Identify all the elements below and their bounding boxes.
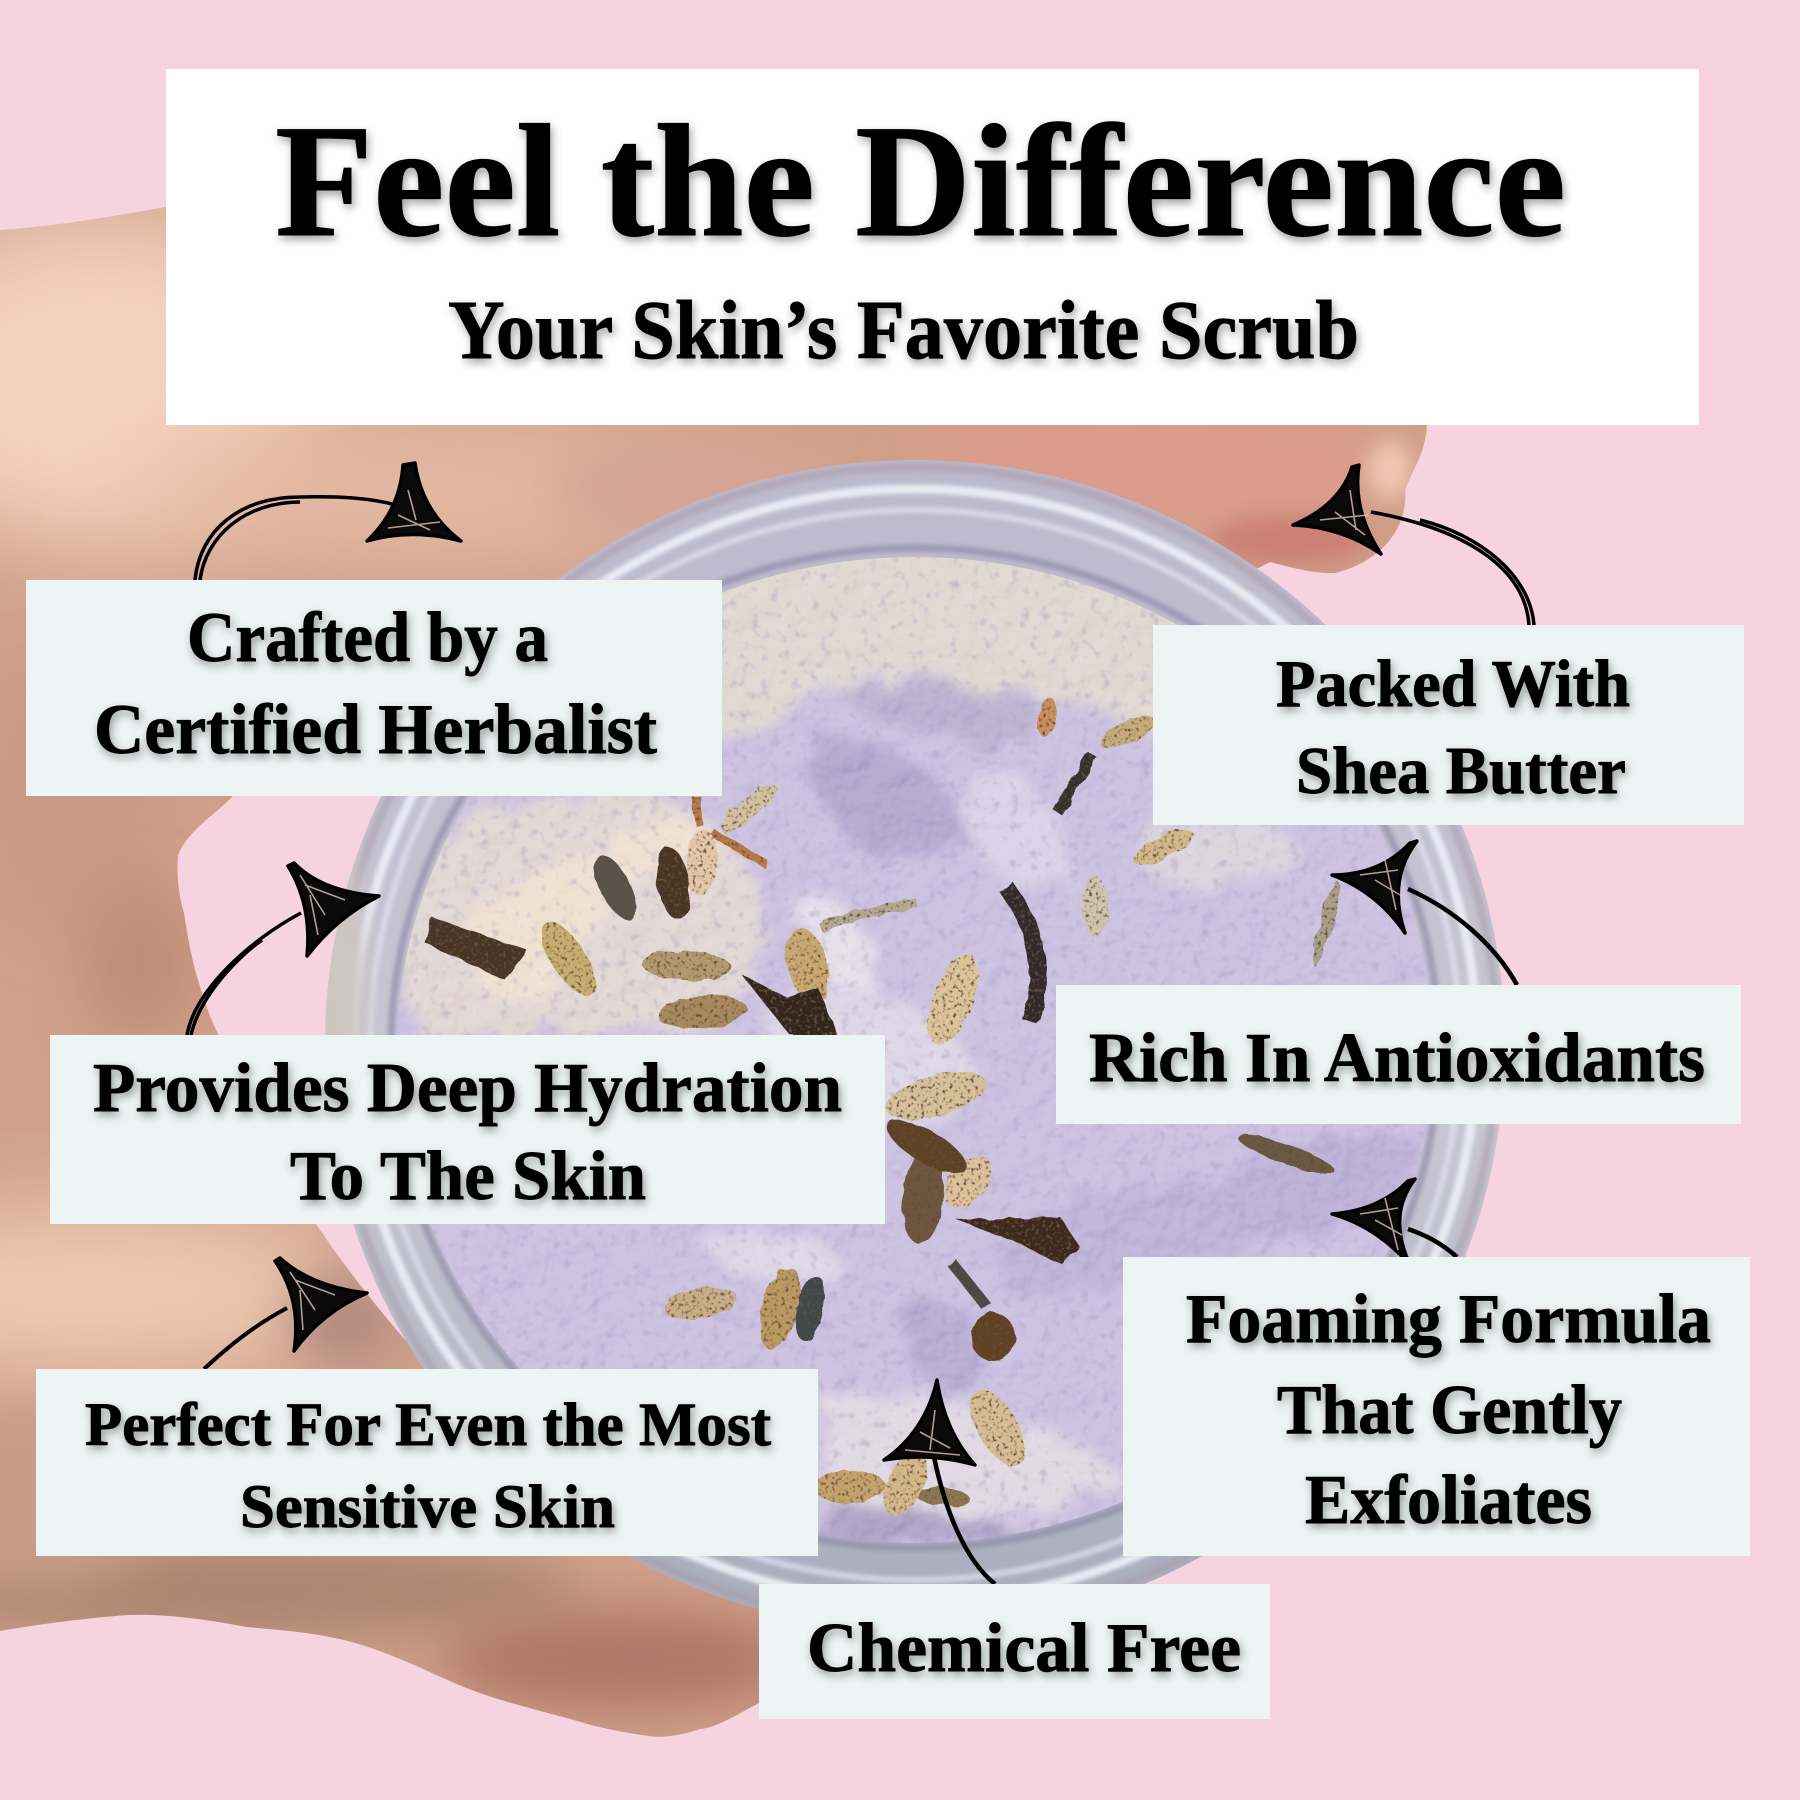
jar contents: scrub [380, 530, 1460, 1560]
scrub speckle [380, 540, 1460, 1560]
callout: foaming formula: Foaming Formula [1186, 1281, 1711, 1358]
callout: packed with shea butter [1153, 625, 1744, 825]
arrow: rich in antioxidants [1332, 841, 1517, 985]
photo: hand holding jar [0, 150, 1505, 1770]
jar glass rim [315, 460, 1505, 1630]
callout: perfect for sensitive skin: Perfect For Even the Most [85, 1392, 772, 1459]
callout: provides deep hydration: Provides Deep Hydration [93, 1050, 842, 1127]
arrow: provides deep hydration [187, 863, 379, 1035]
cream and lavender swirls [394, 530, 1430, 1545]
callout: crafted by a certified herbalist: Crafted by a [187, 599, 548, 677]
callout: rich in antioxidants [1056, 985, 1741, 1124]
arrow: chemical free [884, 1380, 995, 1584]
arrow: perfect for sensitive skin [204, 1258, 367, 1369]
title: Feel the Difference [275, 92, 1566, 270]
callout: provides deep hydration: To The Skin [290, 1138, 646, 1215]
callout: foaming formula: Exfoliates [1305, 1462, 1592, 1539]
callout: chemical free: Chemical Free [807, 1610, 1241, 1687]
title panel [166, 69, 1699, 425]
callout: packed with shea butter: Shea Butter [1296, 734, 1626, 808]
arrow: packed with shea butter [1293, 465, 1534, 625]
callout: rich in antioxidants: Rich In Antioxidants [1089, 1020, 1705, 1097]
callout: perfect for sensitive skin [36, 1369, 818, 1556]
herb pieces [425, 696, 1344, 1521]
callout: provides deep hydration [50, 1035, 885, 1224]
callout: foaming formula [1123, 1257, 1750, 1556]
subtitle: Your Skin’s Favorite Scrub [448, 284, 1359, 377]
arrow: crafted by a certified herbalist [195, 463, 461, 580]
callout: perfect for sensitive skin: Sensitive Skin [240, 1474, 615, 1541]
callout: crafted by a certified herbalist [26, 580, 722, 796]
callout: chemical free [759, 1584, 1270, 1719]
scrub bump texture [380, 540, 1460, 1560]
callout: packed with shea butter: Packed With [1276, 647, 1630, 721]
callout: crafted by a certified herbalist: Certified Herbalist [94, 691, 657, 769]
arrow: foaming formula [1332, 1179, 1457, 1265]
callout: foaming formula: That Gently [1277, 1372, 1622, 1449]
hand [0, 207, 1427, 1737]
